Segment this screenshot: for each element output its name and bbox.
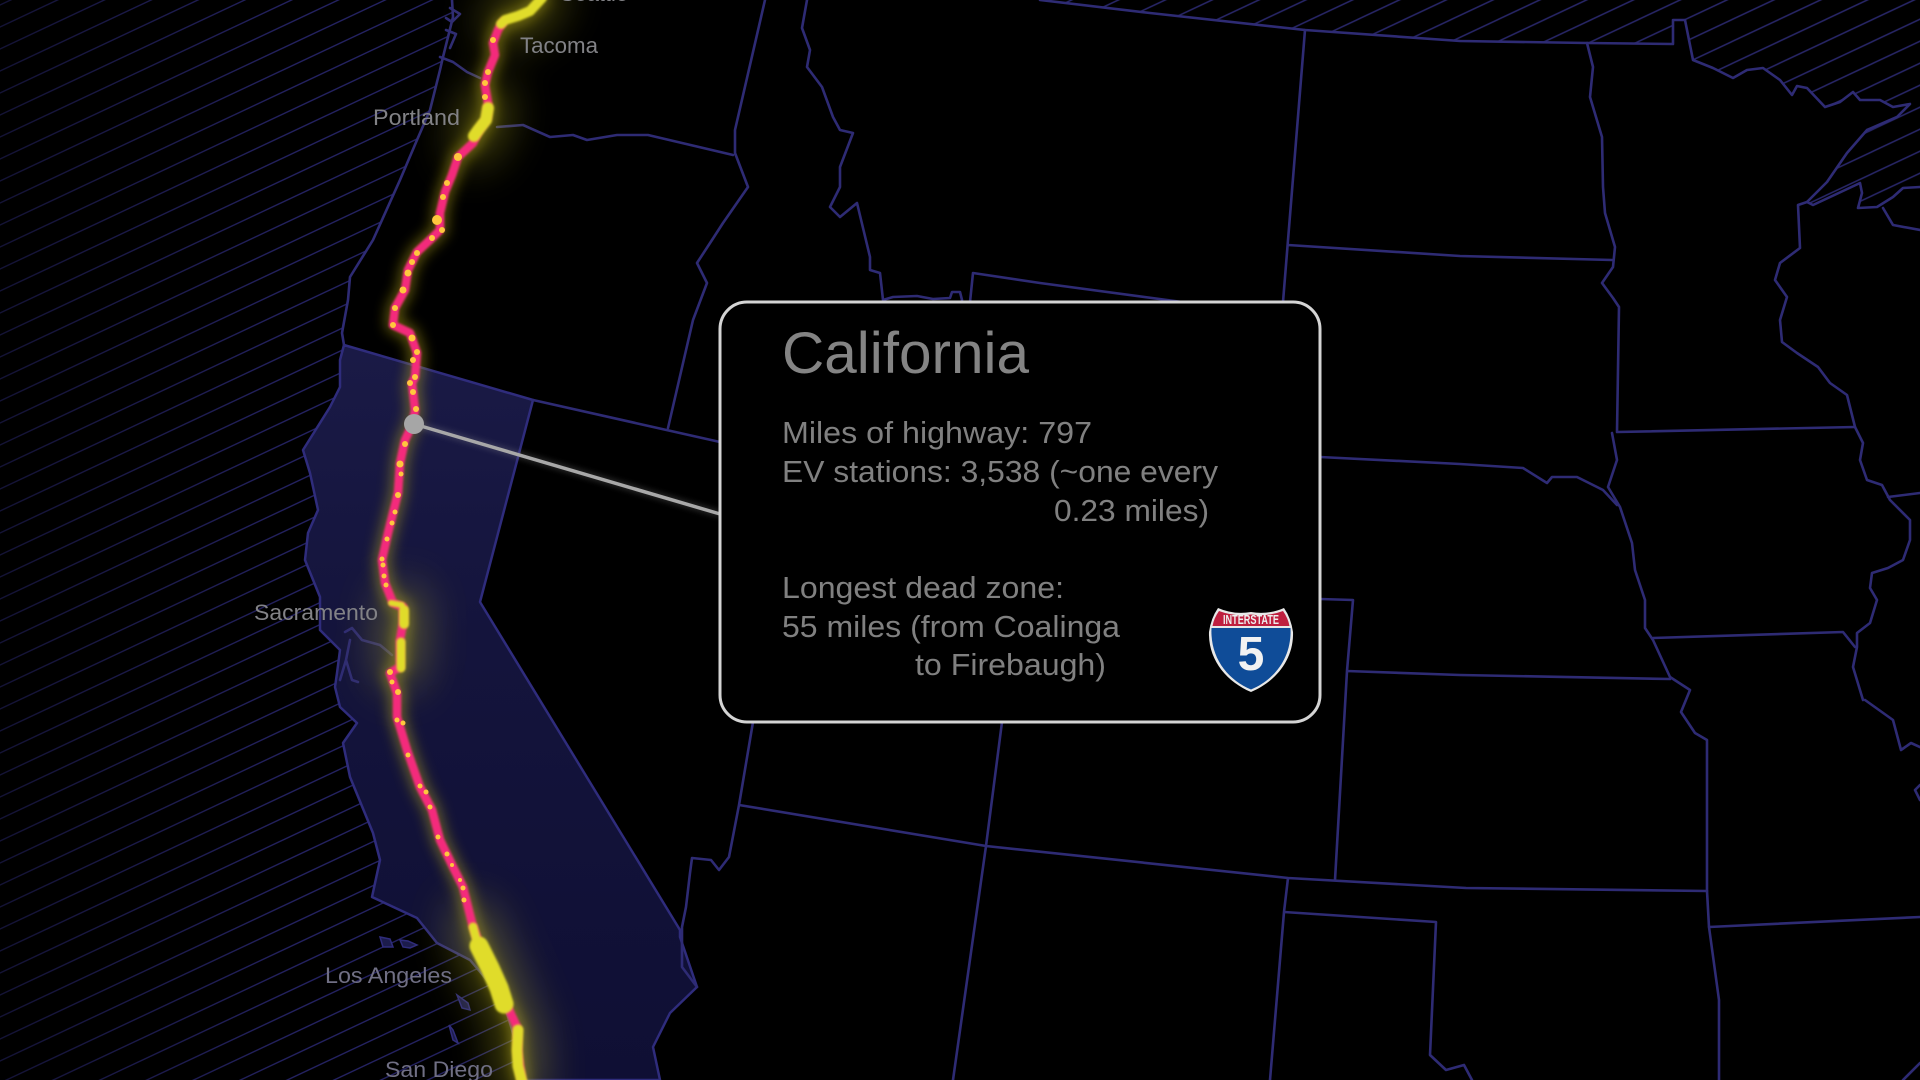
EV station dots (380, 37, 496, 902)
leader line from route to callout (404, 414, 720, 514)
Interstate 5 EV route with station glow (382, 0, 542, 1080)
label: Sacramento: Sacramento (254, 600, 378, 625)
route glow (382, 0, 542, 1080)
yellow dense-station segments (391, 0, 542, 1080)
icon: Interstate 5 shield: INTERSTATE (1223, 613, 1279, 627)
Channel Islands (380, 937, 470, 1043)
label: Tacoma: Tacoma (520, 33, 599, 58)
ocean edge dimming (0, 0, 300, 1080)
stats text: 0.23 miles) (1054, 493, 1209, 528)
heading: California (782, 321, 1030, 386)
pink highway line (382, 22, 522, 1080)
stats text (782, 415, 1218, 528)
city labels (254, 0, 628, 1080)
stats text: EV stations: 3,538 (~one every (782, 454, 1218, 489)
hatched Pacific Ocean (0, 0, 520, 1080)
label: Los Angeles: Los Angeles (325, 963, 452, 988)
callout panel: California (720, 302, 1320, 722)
dead zone text (782, 570, 1121, 682)
stats text: Miles of highway: 797 (782, 415, 1092, 450)
icon: Interstate 5 shield: 5 (1238, 628, 1264, 681)
California state shape (303, 345, 697, 1080)
label: Portland: Portland (373, 105, 460, 130)
hatched Canada and Great Lakes (1040, 0, 1920, 208)
dead zone text: to Firebaugh) (915, 647, 1106, 682)
icon: Interstate 5 shield (1209, 608, 1293, 692)
dead zone text: Longest dead zone: (782, 570, 1064, 605)
dead zone text: 55 miles (from Coalinga (782, 609, 1121, 644)
dense-station wide glow (400, 0, 542, 1080)
